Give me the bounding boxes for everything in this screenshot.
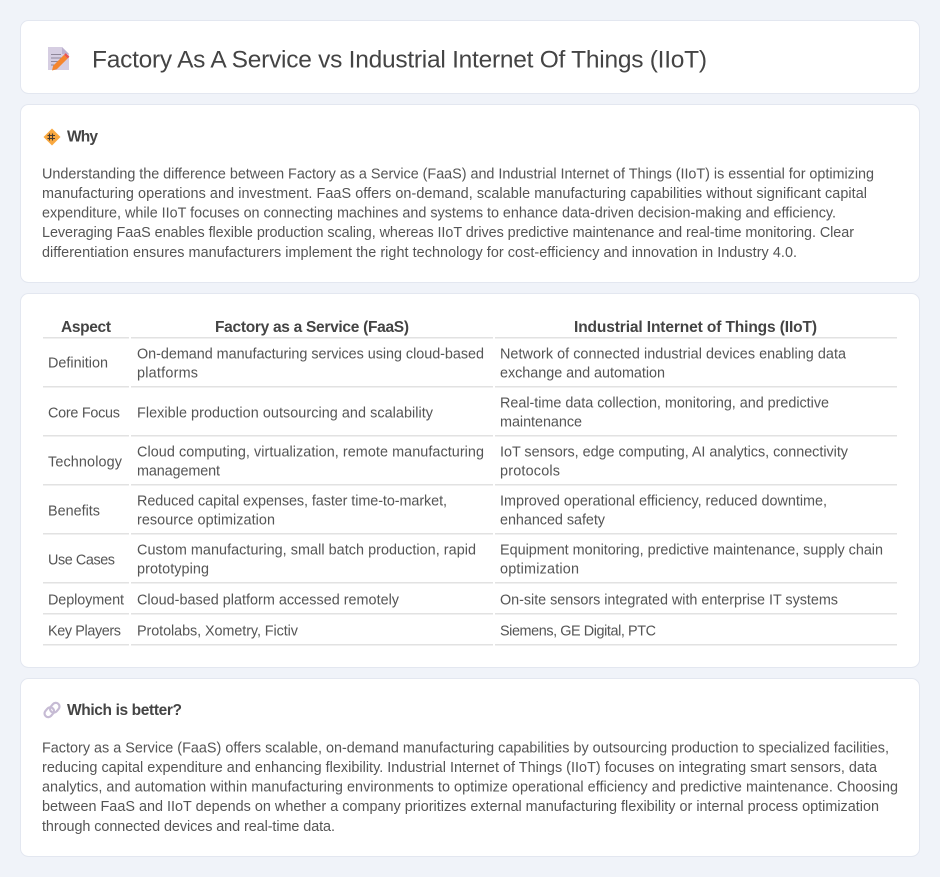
panel: which is better — [20, 678, 920, 856]
text block: why: Understanding the difference between Factory as a Service (FaaS) and Industrial Internet of Things (IIoT) is essential for optimizing — [42, 166, 874, 182]
text block: which is better: analytics, and automation within manufacturing environments to optimize operational efficiency and predictive maintenance. Choosing — [42, 780, 898, 796]
row: use cases: Custom manufacturing, small batch production, rapid — [137, 542, 476, 558]
row: key players: Key Players — [48, 624, 121, 640]
row: technology — [48, 444, 849, 480]
row: definition: exchange and automation — [500, 366, 665, 382]
panel: comparison table — [20, 294, 920, 668]
row: deployment: Deployment — [48, 592, 124, 608]
row: definition: On-demand manufacturing services using cloud-based — [137, 346, 484, 362]
row: benefits: Improved operational efficiency, reduced downtime, — [500, 494, 827, 510]
row: technology: Technology — [48, 454, 123, 470]
text block: which is better: reducing capital expenditure and enhancing flexibility. Industrial Internet of Things (IIoT) focuses on integrating smart sensors, data — [42, 760, 877, 776]
row: benefits: enhanced safety — [500, 512, 606, 528]
text block: why: differentiation ensures manufacturers implement the right technology for cost-efficiency and innovation in Industry 4.0. — [42, 245, 797, 261]
row: use cases: optimization — [500, 562, 579, 578]
row: technology: Cloud computing, virtualization, remote manufacturing — [137, 444, 484, 460]
row: deployment: Cloud-based platform accessed remotely — [137, 592, 400, 608]
row: use cases: Use Cases — [48, 552, 115, 568]
heading: which is better: Which is better? — [67, 702, 182, 719]
row: key players: Protolabs, Xometry, Fictiv — [137, 624, 299, 640]
icon: chain link — [43, 701, 61, 719]
title text: Factory As A Service vs Industrial Internet Of Things (IIoT) — [92, 46, 707, 74]
panel: title — [20, 20, 920, 94]
text block: which is better: through connected devices and real-time data. — [42, 819, 335, 835]
row: benefits: Benefits — [48, 504, 100, 520]
row: definition — [48, 346, 846, 382]
text block: which is better: between FaaS and IIoT depends on whether a company prioritizes external manufacturing flexibility or internal process optimization — [42, 799, 879, 815]
row: core focus: Flexible production outsourcing and scalability — [137, 406, 434, 422]
row: benefits: Reduced capital expenses, faster time-to-market, — [137, 494, 447, 510]
row: use cases: prototyping — [137, 562, 209, 578]
icon: document with pencil — [48, 47, 69, 70]
row: technology: protocols — [500, 464, 560, 480]
text block: why: manufacturing operations and investment. FaaS offers on-demand, scalable manufacturing capabilities without significant capital — [42, 186, 867, 202]
text block: which is better: Factory as a Service (FaaS) offers scalable, on-demand manufacturing capabilities by outsourcing production to specialized facilities, — [42, 740, 889, 756]
row: key players: Siemens, GE Digital, PTC — [500, 624, 656, 640]
table header: Factory as a Service (FaaS) — [215, 319, 409, 336]
text block: which is better — [42, 740, 898, 835]
row: core focus — [48, 396, 829, 430]
row: use cases — [48, 542, 883, 578]
row: technology: IoT sensors, edge computing, AI analytics, connectivity — [500, 444, 849, 460]
row: key players — [48, 624, 656, 640]
text block: why — [42, 166, 874, 261]
row: core focus: Core Focus — [48, 406, 120, 422]
row: benefits: resource optimization — [137, 512, 275, 528]
row: deployment: On-site sensors integrated with enterprise IT systems — [500, 592, 838, 608]
table header: Aspect — [61, 319, 111, 336]
text block: why: expenditure, while IIoT focuses on connecting machines and systems to enhance data-driven decision-making and efficiency. — [42, 206, 836, 222]
panel: why — [20, 104, 920, 282]
row: definition: Network of connected industrial devices enabling data — [500, 346, 846, 362]
heading: why: Why — [67, 128, 98, 146]
row: use cases: Equipment monitoring, predictive maintenance, supply chain — [500, 542, 883, 558]
row: benefits — [48, 494, 827, 528]
table header: Industrial Internet of Things (IIoT) — [574, 319, 817, 336]
row: core focus: maintenance — [500, 414, 582, 430]
icon: orange warning diamond — [44, 128, 60, 146]
row: definition: Definition — [48, 356, 108, 372]
row: technology: management — [137, 464, 220, 480]
row: core focus: Real-time data collection, monitoring, and predictive — [500, 396, 829, 412]
row: deployment — [48, 592, 838, 608]
table header — [61, 319, 817, 336]
text block: why: Leveraging FaaS enables flexible production scaling, whereas IIoT drives predictive maintenance and real-time monitoring. Clear — [42, 225, 854, 241]
table rules — [43, 337, 897, 646]
row: definition: platforms — [137, 366, 198, 382]
